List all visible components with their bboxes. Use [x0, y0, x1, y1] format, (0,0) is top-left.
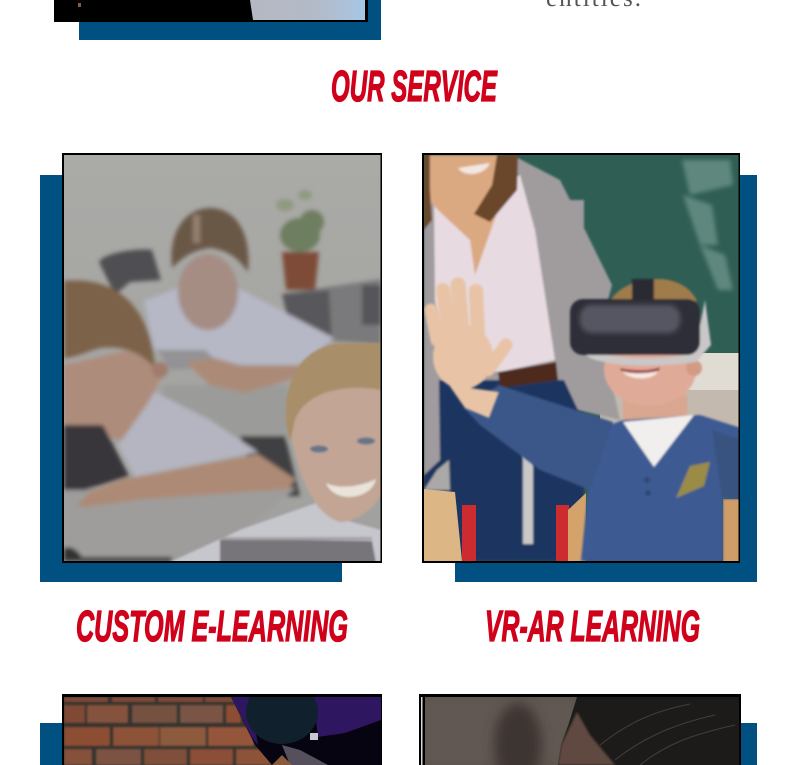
photo: boy with vr headset [422, 153, 741, 563]
panel: custom e-learning [40, 153, 382, 651]
heading: our service: OUR SERVICE [331, 62, 498, 111]
woman [424, 155, 620, 561]
blue backing [40, 723, 342, 765]
boy [464, 279, 741, 561]
blue backing [455, 723, 757, 765]
hand [431, 285, 506, 418]
panel: vr-ar learning [422, 153, 757, 651]
blue backing [455, 175, 757, 582]
photo: children with tablets [62, 153, 382, 563]
photo: close-up of student [419, 694, 741, 765]
chairs [424, 489, 739, 561]
top image panel with blue backing [54, 0, 381, 40]
photo: brick wall and student [62, 694, 382, 765]
blue backing [40, 175, 342, 582]
panel: third service card (cropped) [40, 694, 382, 765]
label: custom e-learning: CUSTOM E-LEARNING [76, 602, 348, 651]
panel: fourth service card (cropped) [419, 694, 757, 765]
